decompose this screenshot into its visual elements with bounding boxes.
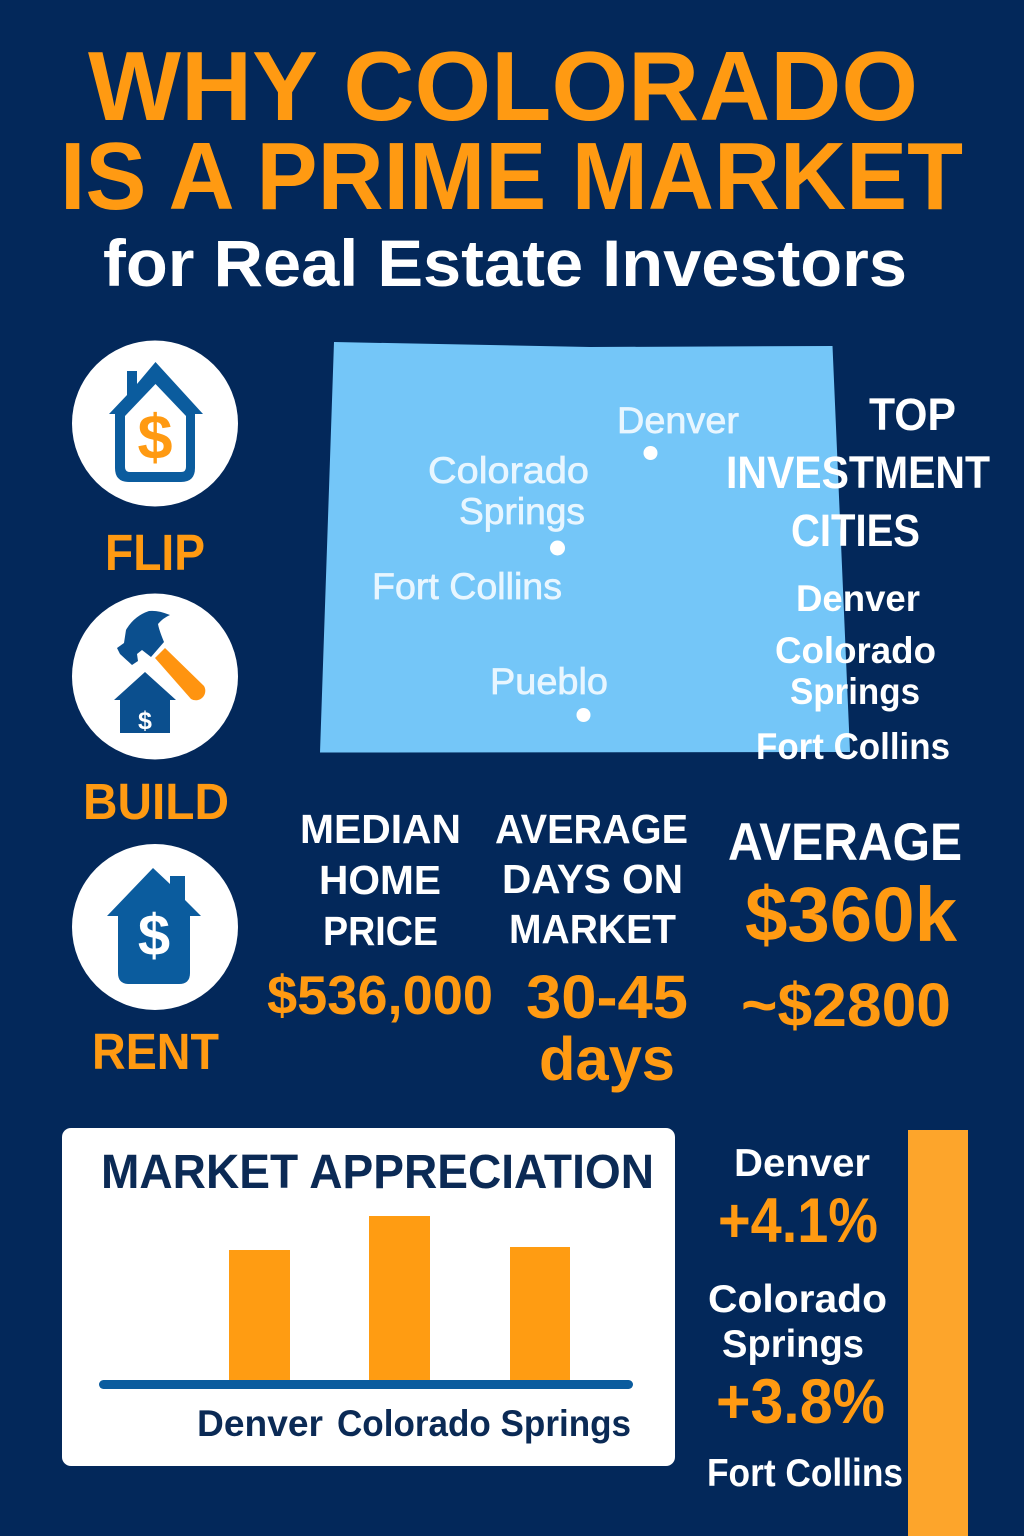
stat: median home price: HOME [319, 857, 441, 903]
map: Colorado [320, 342, 850, 752]
stat: median home price: MEDIAN [300, 806, 461, 852]
title: for Real Estate Investors [103, 226, 907, 300]
map label: Denver: Denver [617, 400, 739, 441]
title: WHY COLORADO [88, 31, 918, 141]
list: appreciation by city: +4.1% [718, 1186, 878, 1256]
title [60, 31, 963, 300]
chart heading: MARKET APPRECIATION [101, 1146, 654, 1199]
stat: average days on market: days [539, 1025, 675, 1093]
stat: average price and rent: ~$2800 [741, 971, 951, 1039]
list: appreciation by city: +3.8% [716, 1367, 885, 1437]
panel: investment strategies [72, 340, 238, 1080]
map label: Pueblo: Pueblo [490, 661, 608, 702]
icon: hammer and house [72, 594, 238, 760]
list: appreciation by city: Colorado [708, 1278, 887, 1321]
bar chart [99, 1216, 633, 1389]
list: appreciation by city: Fort Collins [707, 1452, 903, 1495]
stat: median home price: PRICE [323, 908, 438, 954]
stat: average days on market: DAYS ON [502, 856, 683, 902]
title: IS A PRIME MARKET [60, 123, 963, 230]
stat: average price and rent: $360k [745, 872, 957, 958]
map label: Colorado Springs: Springs [459, 491, 585, 532]
stat: average days on market: 30-45 [526, 963, 688, 1031]
list: appreciation by city: Springs [722, 1323, 864, 1366]
decorative vertical orange bar [908, 1130, 968, 1536]
icon: flip house with dollar sign: $ [137, 403, 173, 473]
stat: median home price: $536,000 [267, 964, 493, 1026]
list: top investment cities: INVESTMENT [726, 447, 990, 498]
list: top investment cities: CITIES [791, 505, 920, 556]
stat: average days on market: MARKET [509, 906, 676, 952]
stat: median home price [267, 806, 493, 1026]
chart axis labels: Colorado Springs [337, 1403, 631, 1444]
icon: rent house with dollar sign: $ [138, 903, 170, 968]
list: appreciation by city [707, 1142, 903, 1495]
stat: average days on market: AVERAGE [495, 806, 688, 852]
list: top investment cities: Springs [790, 671, 920, 712]
label: flip: FLIP [105, 524, 205, 581]
list: top investment cities: Fort Collins [756, 726, 950, 767]
list: top investment cities: Denver [796, 578, 920, 619]
icon: rent house with dollar sign [72, 844, 238, 1010]
stat: average price and rent [728, 813, 962, 1039]
chart axis labels: Denver [197, 1403, 323, 1444]
icon: flip house with dollar sign [72, 340, 238, 506]
list: appreciation by city: Denver [734, 1142, 870, 1185]
label: build: BUILD [83, 773, 229, 830]
panel: market appreciation chart [62, 1128, 675, 1466]
map label: Fort Collins: Fort Collins [372, 566, 562, 607]
list: top investment cities: TOP [869, 389, 956, 440]
chart axis labels [197, 1403, 631, 1444]
label: rent: RENT [92, 1023, 219, 1080]
list: top investment cities [726, 389, 990, 767]
list: top investment cities: Colorado [775, 630, 936, 671]
icon: hammer and house: $ [138, 707, 152, 735]
stat: average days on market [495, 806, 688, 1093]
stat: average price and rent: AVERAGE [728, 813, 962, 872]
map label: Colorado Springs: Colorado [428, 450, 589, 491]
map label: Colorado Springs [428, 450, 589, 532]
